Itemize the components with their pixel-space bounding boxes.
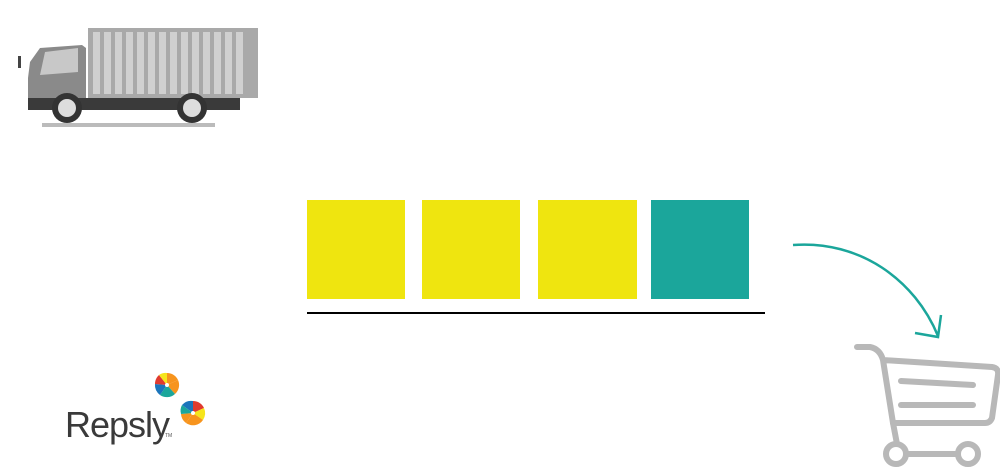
logo: Repsly: TM xyxy=(165,433,172,439)
icon: truck xyxy=(18,28,258,127)
logo: Repsly xyxy=(65,373,205,445)
squares row xyxy=(307,200,765,314)
logo: Repsly: Repsly xyxy=(65,404,170,445)
arrow: curved teal xyxy=(793,245,941,337)
icon: shopping cart xyxy=(857,347,998,464)
